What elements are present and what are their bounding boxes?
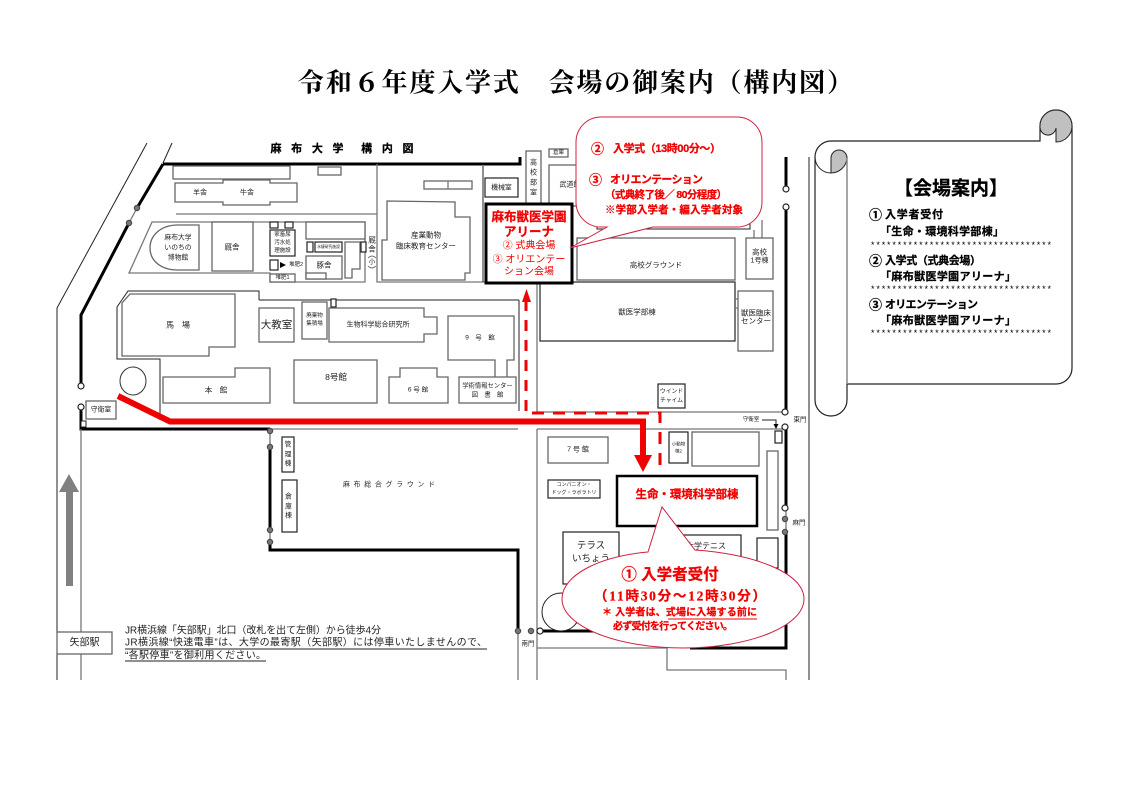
access note [125, 624, 487, 662]
high school club rooms: 室 [530, 188, 537, 196]
life science research institute: 生物科学総合研究所 [346, 320, 410, 328]
management building: 理 [285, 450, 292, 458]
veterinary building: 獣医学部棟 [618, 306, 656, 316]
management building [282, 437, 294, 472]
terrace icho: いちょう [572, 554, 610, 564]
small facilities: 家畜尿 [274, 230, 291, 238]
industrial animal clinical center [382, 201, 470, 280]
waste storage [302, 302, 327, 339]
gate labels: 麻門 [792, 518, 806, 526]
tennis court [680, 535, 741, 567]
small facilities: 堆肥2 [289, 260, 303, 268]
guide item 3: オリエンテーション [885, 298, 978, 311]
life and environmental sciences building [617, 476, 757, 526]
sports ground label: 麻布総合グラウンド [343, 480, 435, 488]
building 8 [294, 360, 377, 403]
wind chime: チャイム [660, 397, 683, 404]
road network [57, 143, 809, 680]
small building [424, 181, 472, 189]
title: 令和６年度入学式 会場の御案内（構内図） [298, 68, 853, 98]
gate labels [522, 414, 806, 648]
veterinary clinical center: 獣医臨床 [741, 308, 771, 318]
martial arts hall: 武道館 [560, 180, 580, 188]
pig house area: 豚舎 [316, 260, 332, 270]
animal block outline [129, 222, 365, 282]
arena venue: ③ オリエンテー [493, 254, 565, 266]
building 7: 7 号 館 [567, 444, 589, 454]
guide item 3: ③ [869, 298, 882, 312]
guide item 3 [869, 298, 1051, 338]
red main route arrow [118, 396, 652, 472]
map heading: 麻 布 大 学 構 内 図 [270, 141, 414, 155]
machine room [485, 178, 518, 197]
callout: reception [562, 507, 804, 648]
label: small stable: 舎 [368, 244, 376, 254]
arena venue: ② 式典会場 [503, 238, 555, 252]
callout: reception: ① 入学者受付 [621, 564, 719, 584]
management building: 管 [285, 440, 292, 448]
riding ground [122, 294, 235, 356]
warehouse: 倉 [285, 492, 292, 500]
building 9 [448, 316, 514, 377]
high school ground [577, 238, 735, 280]
building east [692, 432, 759, 466]
museum [150, 225, 199, 270]
main building: 本 館 [205, 384, 228, 394]
terrace icho: テラス [577, 540, 605, 552]
small animal building 2: 小動物 [672, 440, 686, 448]
label: small stable: 厩 [368, 236, 376, 244]
building 6: 6 号 館 [408, 384, 429, 394]
life science research institute [329, 308, 437, 342]
library [459, 377, 516, 403]
guide item 2: 「麻布獣医学園アリーナ」 [880, 269, 1016, 283]
management building: 棟 [285, 458, 292, 468]
guide item 1 [869, 207, 1051, 250]
wind chime [658, 384, 685, 408]
tennis court: 大学テニス [686, 540, 726, 550]
guide item 2 [869, 253, 1051, 294]
building 6 [389, 368, 448, 403]
small facilities: 汚水処 [274, 238, 291, 246]
terrace icho [563, 532, 619, 584]
high school ground: 高校グラウンド [630, 260, 682, 270]
stable [212, 222, 253, 271]
callout: ceremony and orientation: （式典終了後／ 80分程度） [605, 188, 727, 201]
long building east [767, 451, 778, 530]
main building [163, 368, 270, 403]
life and environmental sciences building: 生命・環境科学部棟 [636, 487, 739, 501]
building 7 [548, 437, 608, 463]
building 8: 8号館 [325, 372, 347, 382]
north arrow to campus [59, 474, 79, 586]
riding ground: 馬 場 [166, 320, 190, 330]
warehouse [282, 480, 297, 532]
companion dog laboratory: コンパニオン・ [556, 482, 592, 488]
guard room west [81, 401, 116, 427]
building east lower [757, 538, 778, 568]
museum: 麻布大学 [164, 232, 192, 242]
large lecture hall [259, 308, 294, 342]
label: small stable [368, 236, 376, 268]
guard room east [743, 415, 782, 443]
guide item 1: 「生命・環境科学部棟」 [880, 224, 1004, 238]
storehouse: 倉庫 [553, 148, 564, 156]
sheep and cattle sheds: 羊舎 [193, 188, 207, 196]
small facilities: 堆肥1 [275, 273, 290, 281]
industrial animal clinical center: 産業動物 [411, 230, 441, 240]
museum: いのちの [164, 244, 192, 252]
companion dog laboratory: ドッグ・ラボラトリ [551, 489, 597, 496]
high school building 1 [746, 238, 773, 279]
warehouse: 庫 [285, 502, 292, 510]
pond [120, 367, 146, 395]
pig house area: 水棲研究施設 [317, 244, 340, 249]
waste storage: 集積場 [306, 319, 323, 327]
label: small stable: 小 [369, 256, 376, 266]
callout: ceremony and orientation: 入学式（13時00分～） [613, 141, 721, 155]
machine room: 機械室 [491, 182, 512, 192]
callout: ceremony and orientation: ② [591, 142, 604, 156]
guide item 3: 「麻布獣医学園アリーナ」 [880, 313, 1016, 327]
access note: “各駅停車”を御利用ください。 [125, 648, 266, 662]
arena venue: ション会場 [504, 264, 554, 278]
stable: 厩舎 [224, 242, 240, 252]
callout: reception: 必ず受付を行ってください。 [613, 620, 733, 632]
high school club rooms: 部 [530, 178, 537, 186]
scroll heading: 【会場案内】 [894, 178, 1008, 200]
guide item 2: ② [869, 254, 882, 268]
sheep and cattle sheds: 牛舎 [240, 188, 254, 196]
access note: JR横浜線「矢部駅」北口（改札を出て左側）から徒歩4分 [125, 624, 381, 636]
gate labels: 南門 [522, 638, 534, 648]
pig house area [306, 222, 366, 279]
access note: JR横浜線“快速電車”は、大学の最寄駅（矢部駅）には停車いたしませんので、 [125, 636, 487, 648]
small facilities [270, 222, 303, 282]
industrial animal clinical center: 臨床教育センター [396, 240, 456, 250]
waste storage: 廃棄物 [306, 311, 323, 319]
small facilities: 理施設 [274, 246, 291, 254]
dashed route to arena [522, 289, 660, 466]
martial arts hall [549, 165, 762, 238]
arena venue: アリーナ [504, 225, 554, 239]
library: 学術情報センター [462, 380, 513, 390]
guide item 1: 入学者受付 [885, 207, 943, 221]
building 9: 9 号 館 [465, 332, 495, 342]
small animal building 2 [669, 432, 688, 463]
veterinary building [540, 282, 735, 341]
gate markers [78, 186, 789, 634]
large lecture hall: 大教室 [261, 318, 292, 331]
high school building 1: 1号棟 [751, 256, 768, 264]
sheep and cattle sheds [173, 166, 297, 205]
scroll panel: venue guide [815, 110, 1072, 416]
gate labels: 東門 [794, 414, 806, 424]
guide item 2: ********************************** [871, 284, 1051, 294]
wind chime: ウインド [660, 387, 683, 395]
callout: ceremony and orientation: ※学部入学者・編入学者対象 [605, 203, 744, 216]
storehouse [549, 148, 568, 157]
high school club rooms: 高 [530, 158, 537, 166]
callout: ceremony and orientation [570, 117, 762, 248]
arena venue [486, 204, 572, 283]
library: 図 書 館 [472, 390, 503, 398]
guide item 3: ********************************** [871, 328, 1051, 338]
companion dog laboratory [548, 480, 600, 498]
roundabout [542, 593, 580, 631]
guide item 1: ① [869, 208, 882, 222]
high school club rooms: 校 [530, 168, 537, 176]
guard room east: 守衛室 [743, 415, 760, 423]
veterinary clinical center [735, 291, 773, 351]
arena venue: 麻布獣医学園 [491, 209, 567, 224]
small hut [331, 299, 336, 307]
Yabe station: 矢部駅 [70, 636, 100, 648]
small building north [318, 167, 341, 175]
warehouse: 棟 [285, 510, 292, 520]
guide item 2: 入学式（式典会場） [885, 253, 981, 267]
callout: reception: （11時30分～12時30分） [594, 588, 766, 604]
high school club rooms [526, 151, 541, 204]
high school building 1: 高校 [752, 246, 767, 256]
guard room west: 守衛室 [91, 404, 111, 414]
callout: ceremony and orientation: ③ [589, 172, 602, 188]
small animal building 2: 棟2 [675, 448, 682, 454]
Yabe station [57, 632, 112, 654]
callout: reception: ＊ 入学者は、式場に入場する前に [602, 606, 757, 618]
callout: ceremony and orientation: オリエンテーション [610, 173, 703, 186]
museum: 博物館 [168, 252, 188, 262]
veterinary clinical center: センター [741, 316, 771, 326]
guide item 1: ********************************** [871, 240, 1051, 250]
